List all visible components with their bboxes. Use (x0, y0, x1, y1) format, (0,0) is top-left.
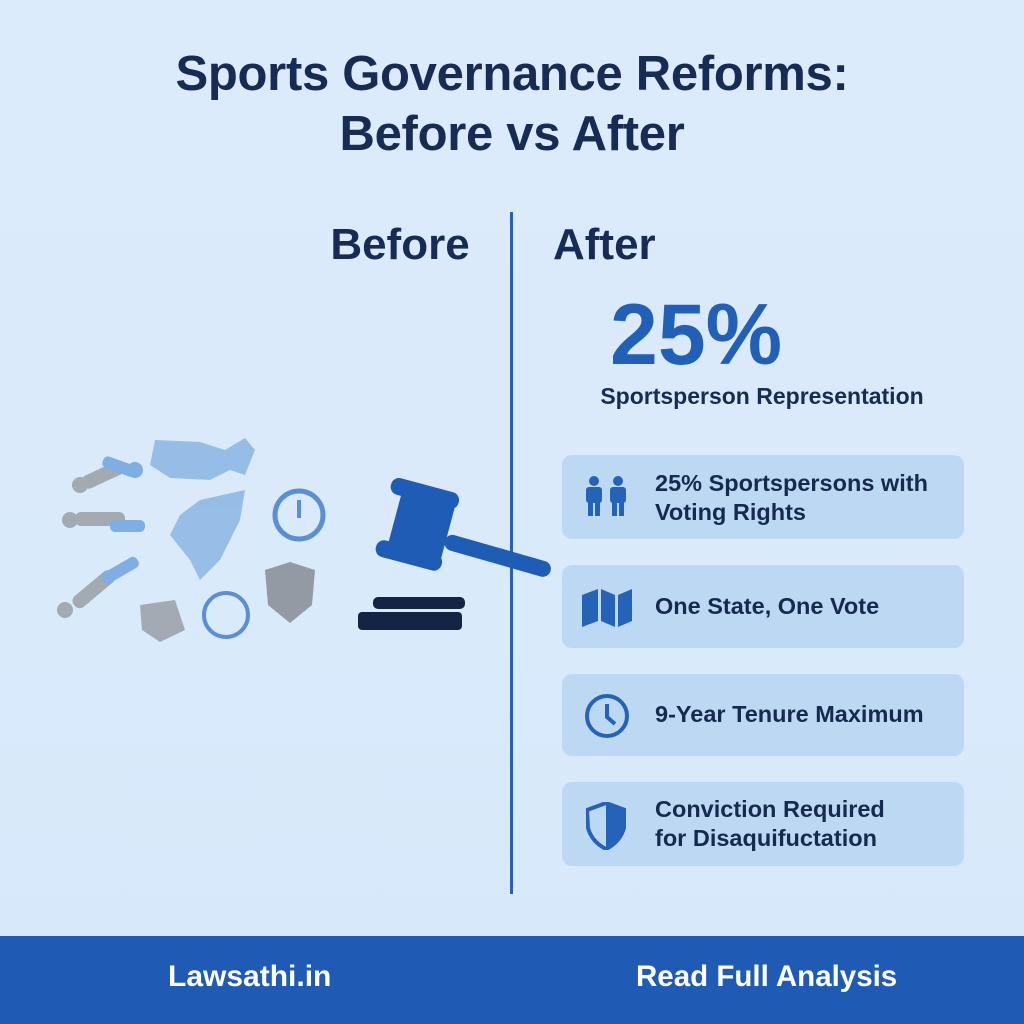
heading: after: After (553, 220, 656, 269)
icon: shield (586, 802, 626, 850)
card: conviction: Conviction Required (655, 796, 885, 822)
stat label: Sportsperson Representation (600, 383, 924, 409)
card: voting rights: 25% Sportspersons with (655, 470, 928, 496)
icon: clock (585, 694, 629, 738)
illustration: before chaos icons (57, 438, 326, 642)
icon: people (586, 476, 626, 516)
footer (0, 936, 1024, 1024)
divider line (510, 212, 513, 894)
card: voting rights (562, 455, 964, 539)
title: Sports Governance Reforms: (176, 47, 848, 101)
card: conviction (562, 782, 964, 866)
stat: 25%: 25% (610, 287, 782, 383)
icon: map (582, 589, 632, 627)
title: Before vs After (340, 107, 684, 161)
card: tenure: 9-Year Tenure Maximum (655, 701, 924, 727)
title (176, 47, 848, 161)
card: one state one vote: One State, One Vote (655, 593, 879, 619)
card: voting rights: Voting Rights (655, 499, 806, 525)
icon: gavel (358, 478, 551, 630)
card: conviction: for Disaquifuctation (655, 825, 877, 851)
footer: site: Lawsathi.in (168, 960, 331, 993)
heading: before: Before (330, 220, 470, 269)
card: one state one vote (562, 565, 964, 648)
card: tenure (562, 674, 964, 756)
footer: cta: Read Full Analysis (636, 960, 897, 993)
